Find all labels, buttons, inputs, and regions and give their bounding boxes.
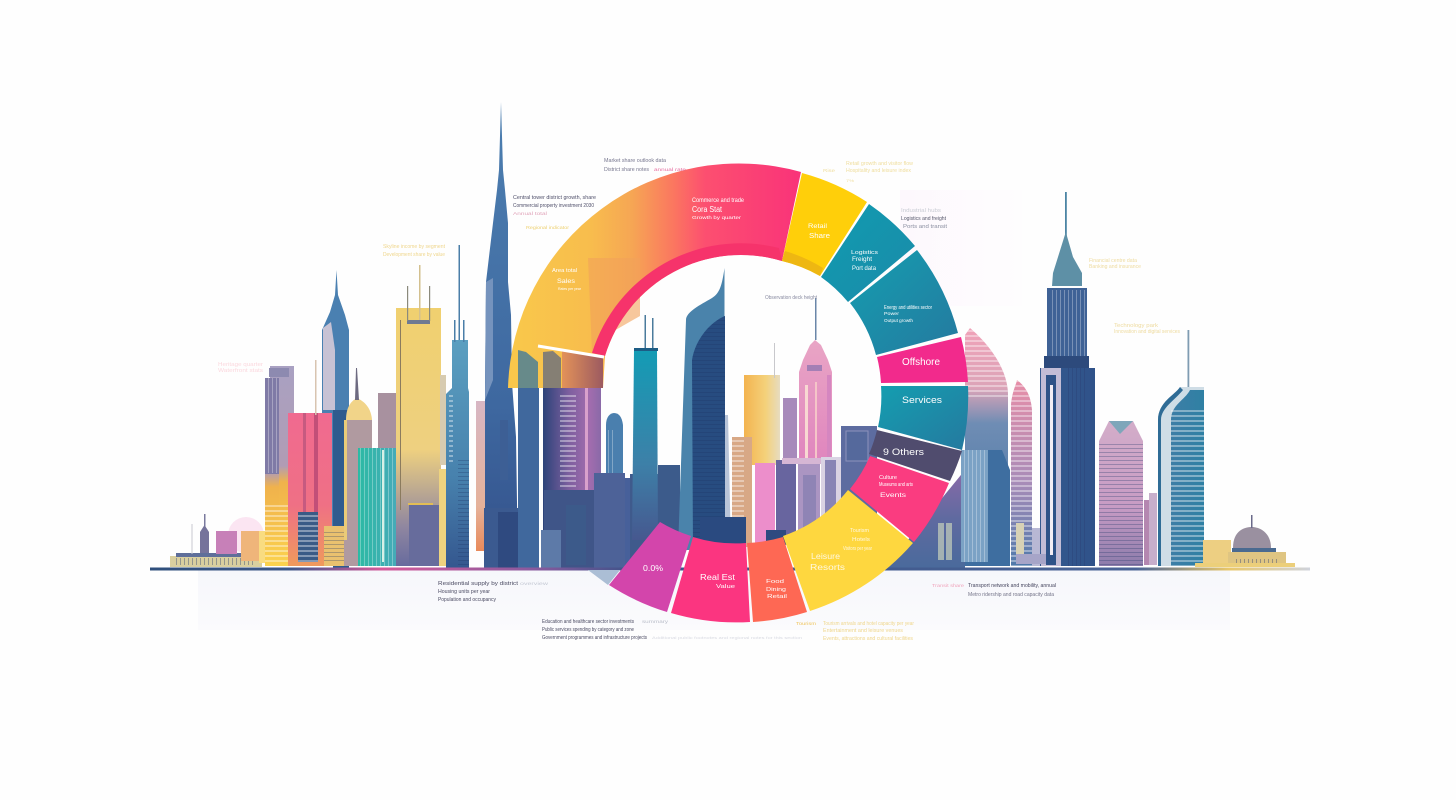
callout text: bottom right yellow: Entertainment and leisure venues bbox=[823, 628, 903, 634]
label: yellow segment bbox=[808, 224, 830, 240]
callout text: right teal: Logistics and freight bbox=[901, 216, 947, 222]
callout text: yellow left bbox=[383, 244, 445, 258]
segment: coral bbox=[747, 537, 807, 622]
skyline: centre inside ring bbox=[594, 268, 877, 568]
skyline: left district bbox=[170, 102, 602, 570]
segment facet: amber inner band bbox=[782, 251, 823, 276]
label: hot pink segment: Value bbox=[716, 584, 735, 590]
callout text: bottom centre: Government programmes and infrastructure projects bbox=[542, 635, 647, 641]
callout text: bottom centre: Additional public footnotes and regional notes for this section bbox=[652, 635, 802, 640]
pink low block bbox=[755, 463, 775, 543]
callout text: bottom right yellow bbox=[796, 621, 914, 642]
label: pink arc: Commerce and trade bbox=[692, 198, 745, 204]
ring white divider bbox=[538, 346, 604, 357]
tall yellow tower bbox=[396, 265, 447, 566]
label: pink tower note: Observation deck height bbox=[765, 295, 818, 301]
callout text: bottom right yellow: Tourism bbox=[796, 621, 816, 626]
callout text: bottom right: Metro ridership and road capacity data bbox=[968, 592, 1055, 598]
segment facet: inner pink band bbox=[592, 243, 782, 356]
callout text: right teal: Ports and transit bbox=[903, 224, 948, 230]
callout text: bottom right yellow: Tourism arrivals and hotel capacity per year bbox=[823, 621, 914, 627]
segment: teal lower bbox=[878, 386, 968, 450]
label: yellow-orange arc bbox=[552, 268, 582, 291]
callout text: right teal bbox=[901, 208, 948, 230]
label: yellow-orange arc: Rates per year bbox=[558, 286, 582, 291]
white ribbed tower bbox=[961, 450, 988, 562]
callout text: pink left: Waterfront stats bbox=[218, 368, 264, 374]
segment: pink bbox=[850, 456, 949, 542]
label: sun yellow segment: Visitors per year bbox=[843, 546, 872, 552]
callout text: top right bbox=[823, 161, 913, 183]
ground line bbox=[150, 568, 1310, 570]
label: sun yellow segment: Leisure bbox=[811, 552, 841, 561]
label: teal segment: Freight bbox=[852, 257, 872, 263]
callout text: far right bbox=[1114, 323, 1180, 335]
blue antenna tower bbox=[446, 245, 469, 570]
coral tower bbox=[288, 360, 350, 566]
label: pink segment: Events bbox=[880, 493, 906, 499]
label: yellow segment: Share bbox=[809, 233, 830, 240]
segment: large yellow to pink arc bbox=[508, 163, 801, 388]
low podium blocks bbox=[484, 508, 518, 568]
label: magenta segment lower: 0.0% bbox=[643, 564, 663, 573]
donut ring chart bbox=[508, 163, 968, 622]
label: pink arc: Cora Stat bbox=[692, 205, 723, 214]
pink and orange blocks bbox=[216, 531, 265, 563]
lower left podium bbox=[541, 505, 586, 568]
translucent tower tops over ring bbox=[518, 346, 604, 388]
curved teal tower bbox=[1158, 330, 1204, 566]
tall blue-lavender spire tower bbox=[322, 270, 349, 570]
tan striped tower bbox=[732, 437, 752, 547]
domed mosque bbox=[1195, 515, 1295, 567]
left tower top overlay bbox=[518, 350, 538, 388]
segment: yellow bbox=[782, 173, 867, 276]
label: pink segment bbox=[879, 475, 913, 499]
thin antenna bbox=[774, 343, 775, 378]
olive tower piece overlay bbox=[543, 351, 561, 388]
callout text: top right: 7% bbox=[846, 178, 855, 183]
segment: teal bbox=[821, 204, 915, 302]
callout text: top centre: District share notes bbox=[604, 167, 649, 173]
pale panel behind right callout bbox=[900, 190, 1022, 306]
callout text: bottom left: Housing units per year bbox=[438, 589, 490, 595]
callout text: far right: Technology park bbox=[1114, 323, 1158, 329]
rounded pink-blue tower bbox=[1011, 380, 1032, 566]
callout text: bottom left: overview bbox=[520, 581, 549, 586]
callout text: yellow left: Skyline income by segment bbox=[383, 244, 445, 250]
callout text: top right: Hospitality and leisure index bbox=[846, 168, 911, 174]
lavender-yellow tower bbox=[265, 366, 294, 566]
bottom caption band bbox=[198, 570, 1230, 630]
segment: dark slate bbox=[869, 430, 962, 481]
skyline: right district behind ring bbox=[885, 192, 1295, 568]
callout text: upper left: Annual total bbox=[513, 211, 547, 216]
low heritage building bbox=[170, 514, 262, 567]
label: pink arc: Growth by quarter bbox=[692, 215, 742, 220]
central blade tower floors bbox=[692, 316, 725, 550]
pale striped columns bbox=[938, 523, 952, 560]
small lavender block bbox=[1032, 528, 1042, 566]
callout text: top right: Retail growth and visitor flow bbox=[846, 161, 913, 167]
callout text: upper left: Regional indicator bbox=[526, 225, 570, 230]
callout text: top right: Rise bbox=[823, 168, 836, 173]
label: hot pink segment: Real Est bbox=[700, 573, 736, 582]
yellow gradient block bbox=[744, 375, 780, 465]
callout text: bottom right: Transit share bbox=[932, 583, 965, 588]
label: teal blue segment bbox=[884, 305, 932, 323]
label: sun yellow segment bbox=[810, 528, 872, 572]
purple blue low tower bbox=[885, 470, 965, 568]
rose tower bbox=[476, 401, 492, 551]
label: pink segment: Museums and arts bbox=[879, 482, 913, 488]
callout text: top centre bbox=[604, 158, 687, 173]
brown tower gradient overlay bbox=[562, 351, 603, 388]
label: coral segment: Retail bbox=[767, 594, 787, 600]
label: sun yellow segment: Hotels bbox=[852, 537, 871, 543]
navy lower blocks bbox=[700, 517, 786, 552]
main right spire tower bbox=[1016, 192, 1095, 566]
callout text: pink left bbox=[218, 362, 264, 374]
segment facet: orange inner bbox=[588, 258, 640, 353]
label: yellow segment: Retail bbox=[808, 224, 827, 230]
dark right flank bbox=[988, 450, 1010, 566]
callout text: right of spire bbox=[1089, 258, 1141, 270]
neon striped tower bbox=[543, 388, 602, 568]
label: yellow-orange arc: Sales bbox=[557, 279, 575, 285]
pink slab tower bbox=[1099, 421, 1143, 566]
central blade tower outer bbox=[678, 268, 724, 550]
segment: hot pink bbox=[671, 537, 750, 622]
segment: magenta purple bbox=[609, 522, 691, 612]
label: teal blue segment: Energy and utilities sector bbox=[884, 305, 932, 311]
segment: magenta bbox=[877, 337, 968, 383]
sun disc bbox=[228, 517, 264, 553]
label: teal blue segment: Output growth bbox=[884, 318, 914, 323]
label: yellow-orange arc: Area total bbox=[552, 268, 577, 274]
callout text: right teal: Industrial hubs bbox=[901, 208, 942, 214]
small blue tower bbox=[606, 413, 623, 480]
slate block bbox=[841, 426, 877, 516]
label: coral segment bbox=[766, 579, 787, 600]
callout text: bottom centre bbox=[542, 619, 802, 641]
thin lavender block bbox=[1144, 493, 1157, 565]
callout text: bottom left: Residential supply by district bbox=[438, 581, 519, 587]
mauve block bbox=[378, 393, 403, 468]
callout text: yellow left: Development share by value bbox=[383, 252, 445, 258]
callout text: top centre: Market share outlook data bbox=[604, 158, 667, 164]
callout text: upper left bbox=[513, 195, 596, 230]
ring labels bbox=[552, 198, 943, 600]
label: coral segment: Food bbox=[766, 579, 784, 585]
callout text: bottom centre: Education and healthcare sector investments bbox=[542, 619, 634, 625]
callout text: upper left: Central tower district growth, share bbox=[513, 195, 596, 201]
label: pink segment: Culture bbox=[879, 475, 897, 481]
label: teal blue segment: Power bbox=[884, 311, 900, 316]
callout text: bottom right yellow: Events, attractions and cultural facilities bbox=[823, 636, 913, 642]
label: sun yellow segment: Tourism bbox=[850, 528, 869, 534]
pink tower stripes bbox=[965, 328, 1008, 400]
callout text: bottom right bbox=[932, 583, 1056, 598]
callout text: upper left: Commercial property investment 2030 bbox=[513, 203, 594, 209]
callout text: bottom left: Population and occupancy bbox=[438, 597, 496, 603]
central supertall tower bbox=[485, 102, 518, 568]
right blade sliver bbox=[725, 415, 731, 550]
callout text: right of spire: Banking and insurance bbox=[1089, 264, 1141, 270]
label: teal segment: Port data bbox=[852, 266, 877, 272]
teal antenna tower bbox=[632, 315, 658, 540]
teal stepped tower bbox=[358, 448, 402, 566]
navy tower bbox=[518, 388, 539, 568]
callout text: top centre: annual rate bbox=[654, 167, 687, 172]
callout text: bottom right: Transport network and mobility, annual bbox=[968, 583, 1056, 589]
label: coral segment: Dining bbox=[766, 587, 786, 593]
central blade tower core bbox=[692, 316, 725, 550]
lavender block bbox=[783, 398, 797, 463]
label: sun yellow segment: Resorts bbox=[810, 563, 845, 572]
pink curved tower bbox=[965, 328, 1008, 566]
callout text: right of spire: Financial centre data bbox=[1089, 258, 1138, 264]
segment: teal blue bbox=[850, 250, 958, 355]
left podium bbox=[594, 465, 680, 568]
label: slate segment: 9 Others bbox=[883, 447, 924, 458]
label: magenta segment: Offshore bbox=[902, 357, 940, 368]
label: teal segment bbox=[851, 250, 879, 272]
lavender low blocks bbox=[776, 457, 841, 545]
pink art-deco tower bbox=[799, 298, 832, 462]
label: teal segment: Logistics bbox=[851, 250, 879, 256]
water reflection wedge bbox=[588, 570, 620, 585]
callout text: bottom left bbox=[438, 581, 549, 603]
callout text: far right: Innovation and digital services bbox=[1114, 329, 1180, 335]
label: teal lower segment: Services bbox=[902, 395, 943, 405]
label: pink arc bbox=[692, 198, 745, 220]
callout text: bottom centre: summary bbox=[642, 619, 669, 624]
domed tan tower bbox=[344, 368, 372, 566]
callout text: bottom centre: Public services spending by category and zone bbox=[542, 627, 634, 633]
callout text: pink left: Heritage quarter bbox=[218, 362, 263, 368]
label: hot pink segment bbox=[700, 573, 736, 590]
segment: sun yellow bbox=[783, 490, 913, 611]
